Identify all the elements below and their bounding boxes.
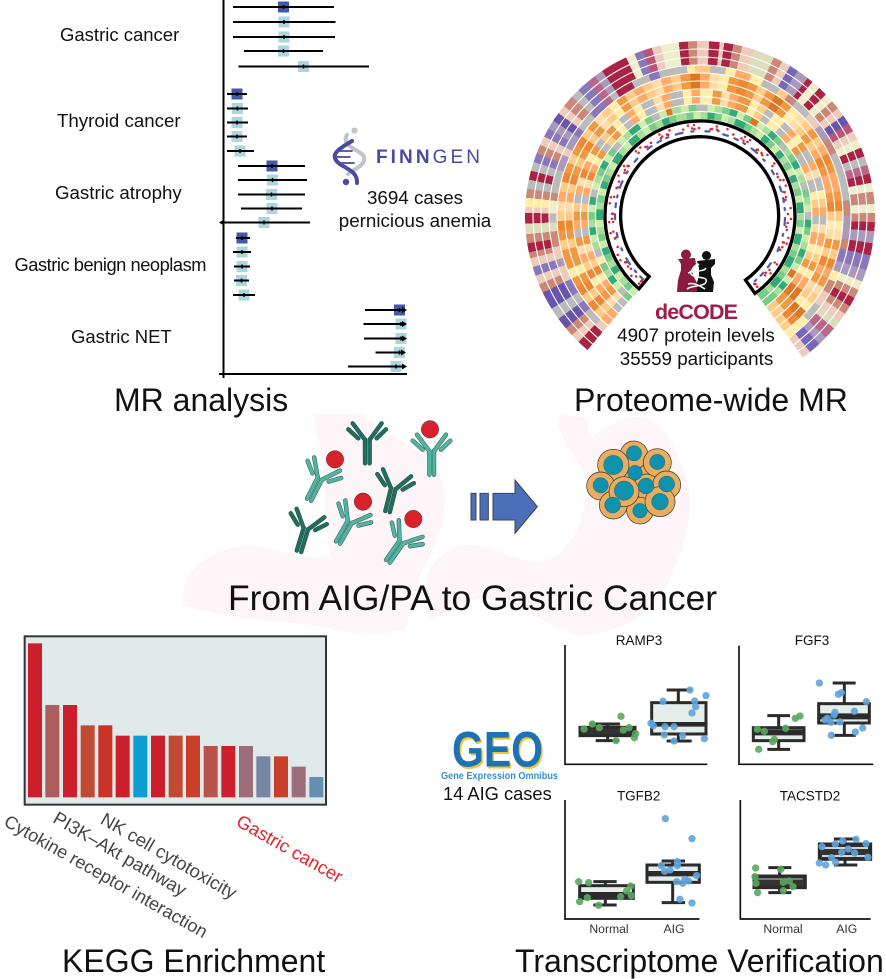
title: FGF3: FGF3: [795, 633, 829, 648]
axis label: AIG: AIG: [836, 922, 857, 936]
logo text: Gene Expression Omnibus: Gene Expression Omnibus: [441, 770, 558, 782]
chart: RAMP3 boxplot: [565, 633, 710, 764]
heading: Proteome-wide MR: Proteome-wide MR: [574, 382, 848, 418]
axis label: Normal: Normal: [763, 922, 803, 936]
heading: MR analysis: MR analysis: [114, 382, 288, 418]
logo text: deCODE: deCODE: [655, 300, 738, 324]
panel: KEGG enrichment bar chart: [25, 636, 326, 805]
label: Gastric cancer: Gastric cancer: [60, 24, 179, 45]
title: TACSTD2: TACSTD2: [780, 789, 840, 804]
icon: FinnGen DNA helix: [335, 128, 364, 185]
text: FinnGen cases: 3694 cases: [367, 187, 463, 208]
title: RAMP3: RAMP3: [616, 633, 662, 648]
text: 14 AIG cases: 14 AIG cases: [443, 783, 552, 804]
chart: TACSTD2 boxplot: [740, 789, 872, 936]
text: protein levels: 4907 protein levels: [617, 324, 775, 346]
logo text: FINNGEN: FINNGEN: [376, 147, 480, 168]
text: participants: 35559 participants: [620, 348, 773, 369]
forest plot axes: [219, 0, 407, 378]
chart: TGFB2 boxplot: [565, 789, 700, 936]
title: TGFB2: TGFB2: [617, 789, 660, 804]
label: Gastric atrophy: Gastric atrophy: [55, 182, 182, 203]
antibodies with antigens: [281, 421, 450, 572]
forest plot: thyroid cancer rows: [227, 88, 254, 156]
heading: Transcriptome Verification: Transcriptome Verification: [515, 943, 884, 979]
axis label: PI3K-Akt pathway: PI3K–Akt pathway: [50, 807, 191, 901]
ring separators of heatmap: [533, 49, 867, 383]
forest plot: gastric atrophy rows: [219, 160, 310, 228]
label: Thyroid cancer: Thyroid cancer: [57, 110, 181, 131]
icon: deCODE figures: [677, 250, 715, 292]
axis label: Cytokine receptor interaction: Cytokine receptor interaction: [1, 811, 211, 942]
Manhattan track with scatter dots: [605, 121, 795, 293]
forest plot: gastric cancer rows: [233, 2, 369, 72]
circular proteome heatmap: [525, 41, 875, 358]
logo: GEO: GEO: [454, 724, 544, 780]
axis label: Gastric cancer: Gastric cancer: [233, 810, 347, 887]
logo: GEO: GEO: [452, 722, 543, 778]
axis label: NK cell cytotoxicity: NK cell cytotoxicity: [97, 808, 241, 904]
axis label: AIG: AIG: [664, 922, 684, 936]
forest plot: gastric NET rows: [348, 304, 407, 372]
label: Gastric NET: Gastric NET: [71, 326, 172, 347]
label: Gastric benign neoplasm: Gastric benign neoplasm: [14, 254, 206, 275]
axis label: Normal: Normal: [589, 922, 629, 936]
heading: From AIG/PA to Gastric Cancer: From AIG/PA to Gastric Cancer: [228, 578, 717, 618]
forest plot: gastric benign neoplasm rows: [233, 232, 255, 300]
heading: KEGG Enrichment: KEGG Enrichment: [62, 943, 325, 979]
text: pernicious anemia: pernicious anemia: [339, 210, 492, 231]
icon: tumour cell cluster: [587, 441, 681, 524]
arrow: AIG to cancer: [471, 480, 537, 533]
chart: FGF3 boxplot: [739, 633, 873, 764]
